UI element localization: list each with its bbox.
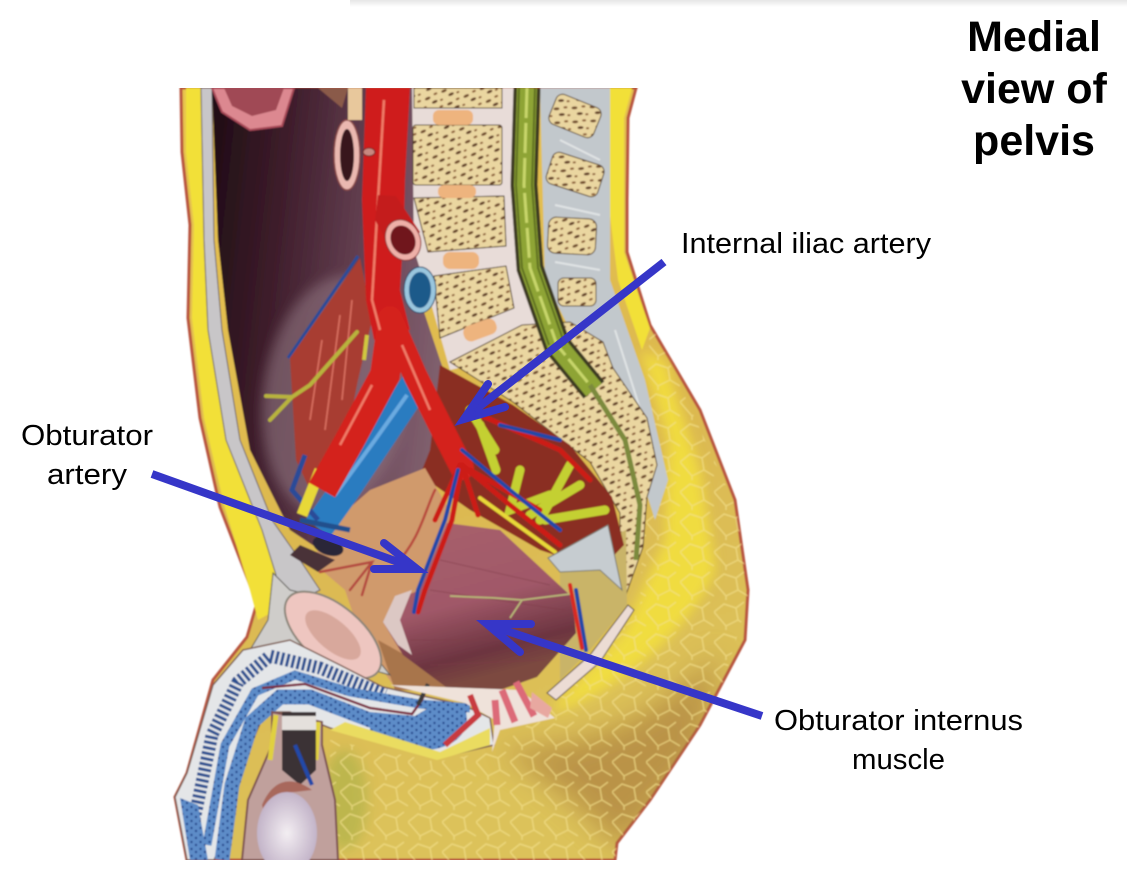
artery highlights	[340, 100, 430, 445]
title: Medial	[967, 13, 1101, 61]
perineal yellow strip	[330, 722, 490, 760]
fat cell texture	[330, 320, 760, 860]
scrotal wall	[242, 712, 338, 860]
pelvic nerves and branches	[320, 410, 605, 650]
penis and urethra	[175, 640, 494, 860]
epididymis	[262, 781, 312, 812]
arrow: obturator artery	[152, 474, 417, 569]
label: internal iliac artery: Internal iliac artery	[681, 228, 932, 260]
internal iliac artery	[390, 318, 462, 468]
bulbus red strip	[445, 695, 478, 745]
pudendal branches	[320, 562, 372, 595]
brown recess under muscle	[378, 640, 446, 691]
external iliac vein	[318, 385, 415, 528]
spinous processes	[544, 92, 606, 306]
vessels around the inguinal region	[292, 440, 350, 530]
obturator branch	[395, 490, 435, 565]
corpus cavernosum band	[207, 675, 470, 845]
spermatic cord	[282, 712, 316, 785]
vena cava stump	[404, 267, 436, 313]
olive shade under the penis	[323, 750, 367, 850]
arteries on lateral wall	[570, 585, 582, 648]
title: pelvis	[973, 117, 1095, 165]
vein highlight	[335, 395, 407, 495]
colon lumen	[224, 88, 284, 116]
vertebra 2	[413, 125, 502, 185]
spine	[412, 88, 657, 603]
vertebra 4	[434, 266, 514, 338]
prostate rectal tissue	[390, 685, 555, 752]
corpus spongiosum band	[222, 697, 425, 860]
nerve stub	[364, 335, 367, 360]
cord vessels	[295, 745, 312, 785]
femoral ring shadow	[310, 532, 346, 560]
arrow: obturator internus muscle	[487, 624, 762, 716]
bulb	[370, 704, 467, 750]
label: obturator internus muscle	[774, 705, 1023, 776]
anal skin folds	[530, 692, 552, 718]
right back wall fat	[608, 88, 650, 350]
testis	[257, 792, 317, 874]
obturator internus muscle	[383, 523, 576, 690]
pale peritoneum halo	[256, 272, 402, 510]
sacrospinous ligament	[548, 525, 622, 590]
sacrum	[450, 322, 657, 603]
top edge shadow	[350, 0, 1127, 7]
pubic region connective tissue	[250, 573, 390, 675]
urethra	[262, 684, 428, 714]
internal iliac branches	[418, 415, 590, 612]
nucleus discs	[433, 110, 473, 125]
left abdominal wall fat	[186, 88, 278, 620]
label: obturator internus muscle: muscle	[852, 744, 945, 776]
dark recess at femoral ring	[290, 545, 335, 572]
pubic symphysis	[270, 576, 396, 694]
sacral nerves	[470, 410, 605, 520]
fat shading layers	[323, 320, 760, 860]
title: view of	[961, 65, 1108, 113]
penis body	[175, 640, 494, 860]
external iliac artery	[322, 325, 392, 490]
buttock brown shade	[500, 650, 720, 850]
psoas edge vessels	[288, 256, 358, 358]
cord nerves	[270, 715, 318, 760]
label: obturator artery: Obturator	[21, 420, 153, 452]
genitofemoral nerve	[266, 332, 357, 420]
title	[961, 13, 1108, 165]
abdominal wall lining	[201, 88, 320, 610]
sectioned intestine ring	[334, 120, 360, 190]
body silhouette	[175, 88, 748, 860]
psoas fibres	[310, 300, 352, 430]
tan peritoneum	[316, 467, 454, 684]
bright yellow inner band	[555, 350, 715, 712]
veins	[414, 425, 586, 650]
muscle fibres	[432, 560, 548, 595]
aorta and common iliac artery	[362, 88, 410, 340]
small lumbar artery	[363, 148, 375, 156]
pale muscle margin	[383, 590, 412, 655]
arrow: internal iliac artery	[464, 262, 664, 419]
label: obturator artery: artery	[47, 459, 128, 491]
anal canal	[495, 682, 534, 725]
vessel band along muscle: yellow	[480, 498, 555, 552]
label: obturator artery	[21, 420, 153, 491]
scrotum	[242, 712, 338, 874]
anatomical illustration	[175, 88, 760, 874]
colon wall	[212, 88, 294, 130]
vertebra 1	[414, 88, 502, 108]
cord tab	[282, 716, 316, 730]
ligament streaks	[554, 139, 640, 406]
vertebra 3	[414, 196, 506, 252]
lower right pelvic wall filler	[560, 530, 627, 680]
spinal canal and nerves	[516, 88, 640, 560]
pelvic floor pale wall band	[547, 605, 634, 700]
label: obturator internus muscle: Obturator internus	[774, 705, 1023, 737]
pelvic cavity back	[420, 365, 624, 570]
glans	[180, 798, 208, 860]
abdominal cavity	[212, 88, 462, 550]
small bowel fragment	[318, 88, 348, 108]
urethra catheter hook	[418, 684, 428, 705]
colon section	[212, 88, 294, 130]
right iliac stump	[375, 195, 427, 266]
back wall ligament	[540, 88, 668, 520]
disc column	[410, 88, 536, 371]
mesentery strip	[348, 88, 362, 120]
erectile stripes band	[193, 656, 385, 825]
psoas muscle	[290, 258, 372, 490]
obturator nerve on muscle	[450, 594, 570, 618]
